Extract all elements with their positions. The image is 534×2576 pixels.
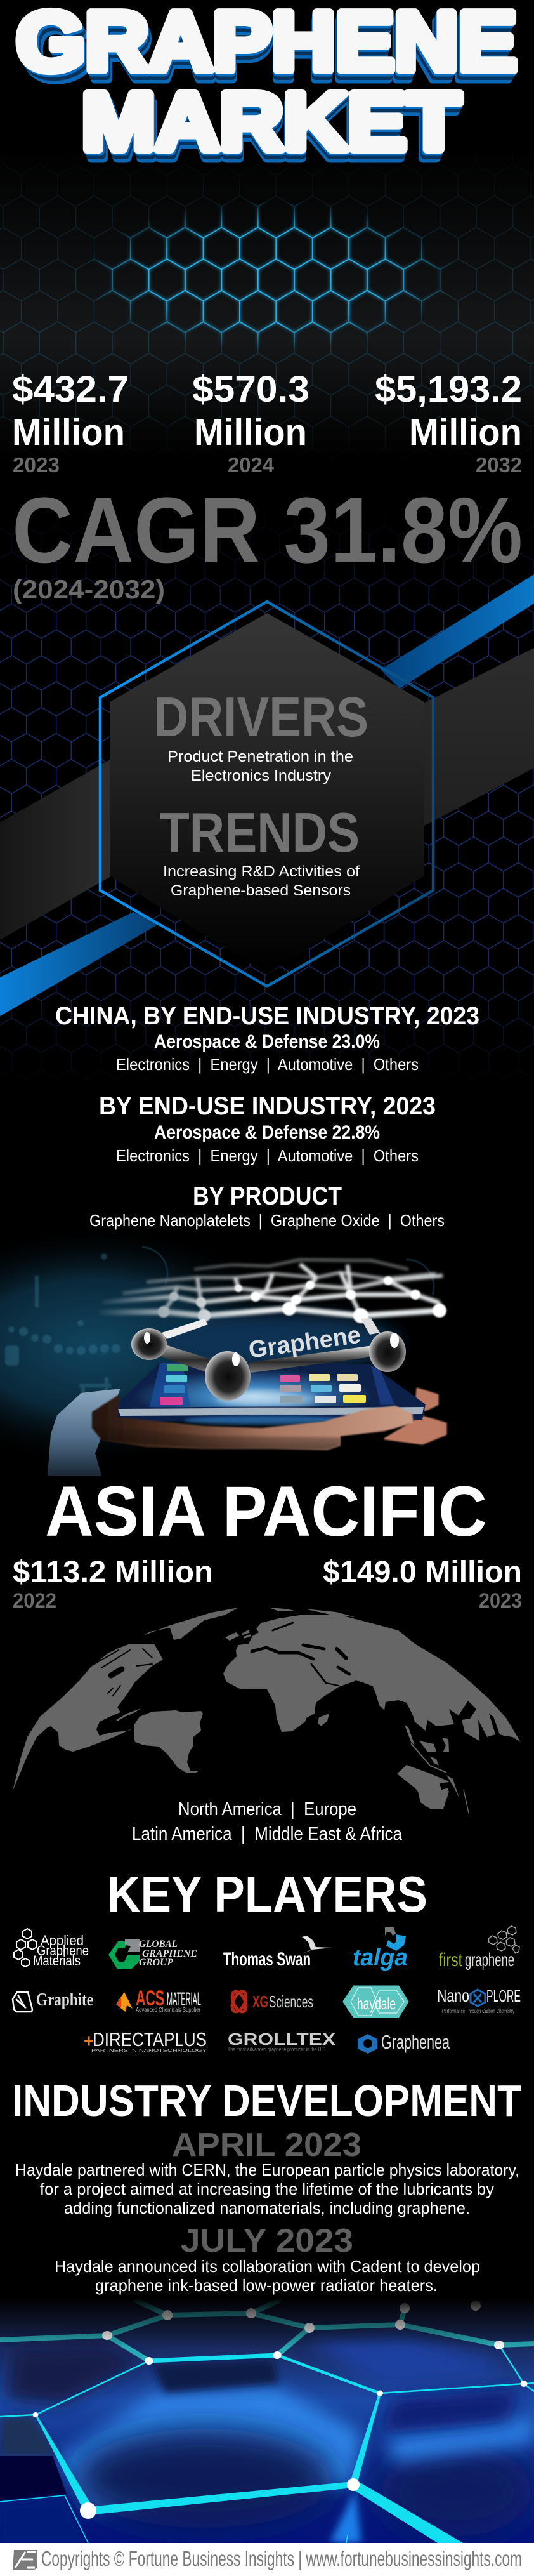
logo: Haydale bbox=[344, 1986, 408, 2017]
logo: Graphenea: Graphenea bbox=[381, 2031, 450, 2053]
title: GRAPHENE MARKET: MARKET bbox=[83, 79, 459, 169]
diagonal band: blue left bbox=[0, 912, 160, 1016]
diagonal band: gray left bbox=[0, 757, 114, 940]
segment: by product: BY PRODUCT bbox=[193, 1182, 342, 1210]
floor base bbox=[0, 2299, 534, 2543]
logo: XG Sciences: Sciences bbox=[269, 1992, 313, 2011]
figure: 2023: $432.7 bbox=[12, 369, 129, 410]
development: July 2023: Haydale announced its collaboration with Cadent to develop bbox=[55, 2257, 480, 2276]
phone side strips bbox=[150, 1363, 394, 1407]
logo: Grolltex bbox=[228, 2030, 336, 2052]
light under phone bbox=[184, 1416, 349, 1425]
logo: ACS Material: ACS bbox=[136, 1986, 164, 2011]
logo: Applied Graphene Materials: Applied bbox=[41, 1932, 84, 1948]
regional value: 2022: 2022 bbox=[13, 1589, 56, 1612]
segment: by end-use industry: Electronics | Energy | Automotive | Others bbox=[116, 1146, 419, 1165]
heading: drivers: DRIVERS bbox=[153, 685, 368, 748]
regional value: 2023: $149.0 Million bbox=[323, 1556, 522, 1589]
teal data backdrop bbox=[0, 1225, 434, 1466]
top fade to black bbox=[0, 2297, 534, 2348]
figure: 2023: 2023 bbox=[13, 453, 60, 477]
figure: 2024: 2024 bbox=[228, 453, 275, 477]
logo: Thomas Swan bbox=[223, 1936, 332, 1970]
molecule spheres bbox=[131, 1328, 406, 1401]
phone body bbox=[117, 1363, 426, 1422]
title: GRAPHENE MARKET bbox=[16, 0, 518, 176]
text: drivers description: Electronics Industry bbox=[191, 767, 331, 784]
seas and lakes cut-outs bbox=[93, 1623, 462, 1696]
continent: Australia bbox=[397, 1765, 449, 1809]
diagonal band: blue right bbox=[381, 574, 534, 689]
development: April 2023: Haydale partnered with CERN, the European particle physics laboratory, bbox=[15, 2160, 519, 2179]
segment: by end-use industry bbox=[99, 1092, 436, 1165]
continent: Eurasia and Africa bbox=[223, 1615, 521, 1742]
label: Graphene: Graphene bbox=[247, 1322, 363, 1364]
figure: 2024: $570.3 bbox=[192, 369, 309, 410]
phone screen glow bbox=[216, 1392, 317, 1406]
regional value: 2022: $113.2 Million bbox=[13, 1556, 213, 1589]
CAGR headline: (2024-2032) bbox=[13, 574, 165, 604]
logo: Directa Plus: DIRECTAPLUS bbox=[93, 2028, 207, 2051]
title: GRAPHENE MARKET: GRAPHENE bbox=[22, 3, 511, 97]
Arctic islands bbox=[225, 1608, 355, 1641]
segment: by product: Graphene Nanoplatelets | Graphene Oxide | Others bbox=[89, 1211, 445, 1230]
logo: Graphenea bbox=[358, 2031, 450, 2054]
lattice nodes bbox=[33, 2301, 528, 2519]
title: GRAPHENE MARKET: MARKET bbox=[81, 76, 460, 168]
text: trends description: Graphene-based Sensors bbox=[171, 882, 351, 899]
hand palm bbox=[92, 1394, 414, 1450]
world map globe bbox=[13, 1608, 521, 1813]
regional value: 2023 bbox=[323, 1556, 522, 1612]
hexagon outline bbox=[100, 602, 433, 986]
figure: 2023 bbox=[12, 369, 129, 477]
logo: Graphite: Graphite bbox=[36, 1990, 93, 2010]
text: trends description bbox=[163, 863, 360, 899]
development: July 2023: JULY 2023 bbox=[181, 2223, 353, 2259]
Madagascar bbox=[318, 1714, 329, 1726]
logo: NanoXplore bbox=[437, 1986, 521, 2015]
Caribbean islands bbox=[116, 1708, 141, 1721]
logo: Global Graphene Group: GROUP bbox=[139, 1957, 173, 1968]
figure: 2032 bbox=[375, 369, 522, 477]
app icons bbox=[160, 1364, 366, 1405]
hexagon fill bbox=[110, 613, 424, 974]
figure: 2023: Million bbox=[12, 412, 125, 453]
logo: ACS Material bbox=[116, 1986, 201, 2014]
continent: Greenland bbox=[143, 1608, 238, 1640]
logo: Applied Graphene Materials: Graphene bbox=[37, 1943, 89, 1958]
logo: Global Graphene Group: GLOBAL bbox=[139, 1939, 178, 1950]
phone screen bbox=[124, 1364, 419, 1408]
floor cell shading bbox=[0, 2335, 534, 2543]
logo: Global Graphene Group: GRAPHENE bbox=[142, 1948, 197, 1959]
segment: China by end-use industry: Electronics | Energy | Automotive | Others bbox=[116, 1055, 419, 1074]
logo: Global Graphene Group bbox=[108, 1939, 197, 1969]
logo: NanoXplore: Nano bbox=[437, 1986, 469, 2005]
segment: by end-use industry: BY END-USE INDUSTRY, 2023 bbox=[99, 1092, 436, 1120]
other regions list: North America | Europe bbox=[178, 1799, 356, 1820]
text: trends description: Increasing R&D Activities of bbox=[163, 863, 360, 880]
development: April 2023 bbox=[15, 2127, 519, 2217]
logo: Thomas Swan: Thomas Swan bbox=[223, 1949, 311, 1970]
logo: Haydale: haydale bbox=[357, 1994, 396, 2013]
logo: Directa Plus: PARTNERS IN NANOTECHNOLOGY bbox=[91, 2049, 207, 2053]
key player logos bbox=[13, 1926, 521, 2054]
continent: South America bbox=[134, 1710, 203, 1773]
heading: trends: TRENDS bbox=[160, 801, 360, 864]
market size figures bbox=[12, 369, 522, 477]
logo: Grolltex: GROLLTEX bbox=[228, 2030, 336, 2049]
title: GRAPHENE MARKET: GRAPHENE bbox=[20, 0, 514, 94]
figure: 2032: Million bbox=[409, 412, 522, 453]
development: July 2023 bbox=[55, 2223, 480, 2295]
segment: by product bbox=[89, 1182, 445, 1230]
logo: Grolltex: The most advanced graphene producer in the U.S bbox=[228, 2046, 325, 2052]
logo: first graphene bbox=[439, 1926, 519, 1971]
phone edge bbox=[118, 1407, 424, 1416]
title: GRAPHENE MARKET: MARKET bbox=[84, 82, 458, 173]
other regions list: Latin America | Middle East & Africa bbox=[132, 1824, 403, 1844]
graphene lattice, distant rows bbox=[99, 1260, 446, 1323]
glowing hexagon background bbox=[0, 146, 534, 463]
illustration: glowing blue hexagon floor bbox=[0, 2297, 534, 2543]
segment: China by end-use industry: Aerospace & Defense 23.0% bbox=[154, 1031, 380, 1052]
logo: XG Sciences: XG bbox=[252, 1992, 268, 2011]
molecule sticks bbox=[147, 1318, 380, 1373]
Indonesia and Philippines bbox=[405, 1725, 469, 1813]
footer bbox=[0, 2543, 534, 2576]
other regions list bbox=[132, 1799, 403, 1844]
figure: 2032: 2032 bbox=[476, 453, 522, 477]
hand shading bbox=[92, 1425, 341, 1450]
segment: by end-use industry: Aerospace & Defense 22.8% bbox=[154, 1122, 380, 1143]
region heading: Asia Pacific: ASIA PACIFIC bbox=[45, 1472, 487, 1551]
logo: ACS Material: Advanced Chemicals Supplier bbox=[136, 2007, 201, 2014]
logo: first graphene: first bbox=[439, 1950, 463, 1971]
illustration: hand holding phone with graphene lattice bbox=[0, 1225, 446, 1476]
development: April 2023: APRIL 2023 bbox=[172, 2127, 361, 2163]
diagonal band: gray right bbox=[419, 648, 534, 829]
regional value: 2022 bbox=[13, 1556, 213, 1612]
key player logos: MATERIAL bbox=[167, 1989, 201, 2010]
figure: 2024: Million bbox=[194, 412, 307, 453]
small blue hexagon mesh background bbox=[0, 501, 534, 1088]
title: GRAPHENE MARKET: MARKET bbox=[86, 85, 456, 176]
logo: talga bbox=[353, 1927, 408, 1971]
development: July 2023: graphene ink-based low-power radiator heaters. bbox=[95, 2276, 438, 2295]
logo: XG Sciences bbox=[230, 1990, 313, 2014]
logo: Graphite bbox=[13, 1990, 93, 2012]
segment: China by end-use industry bbox=[55, 1002, 479, 1074]
text: drivers description: Product Penetration in the bbox=[167, 748, 353, 765]
figure: 2032: $5,193.2 bbox=[375, 369, 522, 410]
development: April 2023: adding functionalized nanomaterials, including graphene. bbox=[64, 2198, 470, 2217]
logo: talga: talga bbox=[353, 1945, 408, 1971]
footer logo bbox=[13, 2550, 37, 2570]
development: April 2023: for a project aimed at increasing the lifetime of the lubricants by bbox=[40, 2179, 494, 2198]
footer background bbox=[0, 2543, 534, 2576]
logo: Applied Graphene Materials: Materials bbox=[33, 1953, 81, 1969]
sleeve bbox=[48, 1389, 120, 1476]
logo: Applied Graphene Materials bbox=[14, 1929, 89, 1969]
glowing graphene lines bbox=[0, 2301, 534, 2543]
segment: China by end-use industry: CHINA, BY END-USE INDUSTRY, 2023 bbox=[55, 1002, 479, 1030]
hand fingers behind phone bbox=[385, 1389, 446, 1444]
regional value: 2023: 2023 bbox=[479, 1589, 522, 1612]
text: drivers description bbox=[167, 748, 353, 784]
panel: drivers and trends hexagon bbox=[100, 602, 433, 986]
Gulf of Carpentaria bbox=[440, 1782, 449, 1790]
figure: 2024 bbox=[192, 369, 309, 477]
continent: North America bbox=[13, 1644, 163, 1791]
heading: key players: KEY PLAYERS bbox=[107, 1866, 427, 1922]
logo: Directa Plus: + bbox=[84, 2031, 94, 2052]
